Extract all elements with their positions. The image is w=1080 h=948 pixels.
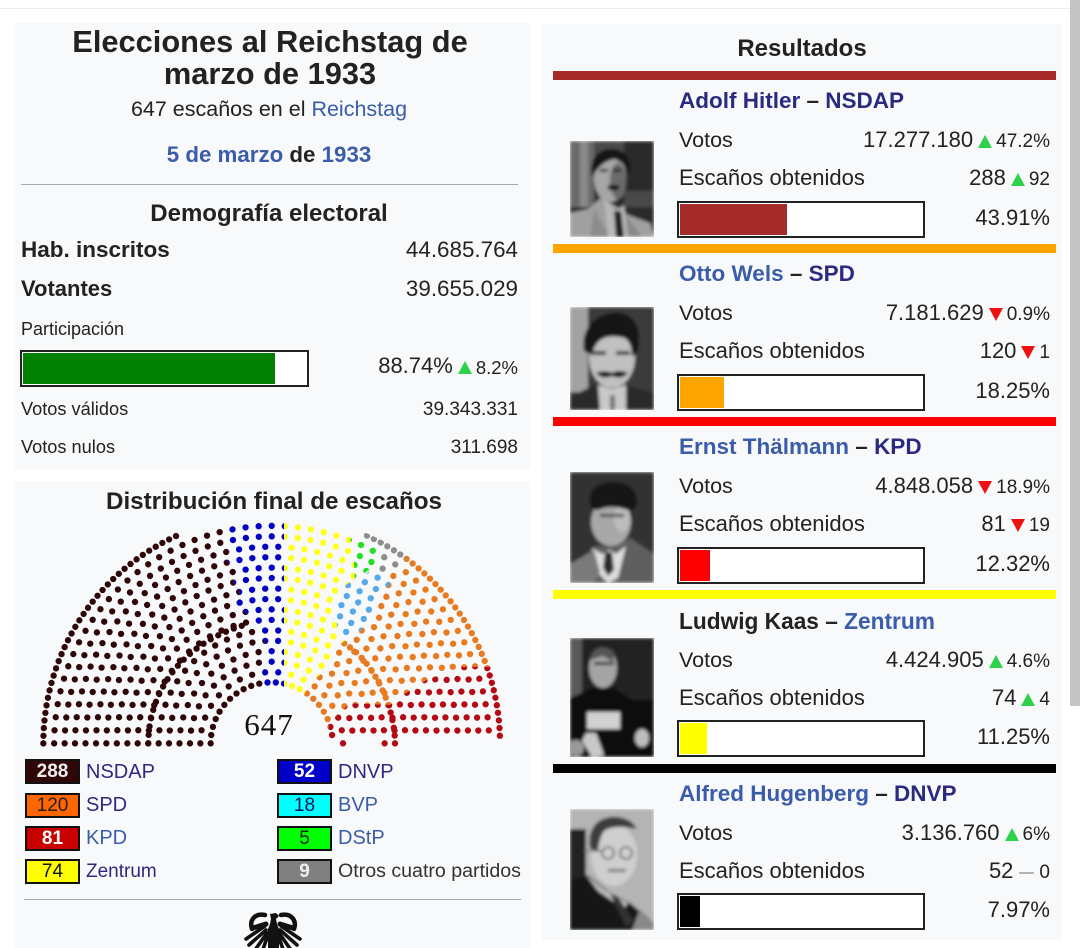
hemicycle chart [40, 522, 503, 746]
seat share: 43.91% [975, 205, 1050, 230]
seats label: Escaños obtenidos [679, 165, 865, 190]
seats label: Escaños obtenidos [679, 338, 865, 363]
legend label: DNVP: DNVP [338, 761, 394, 783]
legend label: NSDAP: NSDAP [86, 761, 155, 783]
seat share bar [677, 201, 925, 238]
heading: results: Resultados [737, 35, 867, 62]
top rule [0, 8, 1070, 9]
legend: BVP: 18 [294, 795, 315, 816]
seats label: Escaños obtenidos [679, 685, 865, 710]
legend label: DStP: DStP [338, 827, 385, 849]
heading: seat distribution: Distribución final de escaños [106, 488, 442, 515]
null votes value: 311.698 [451, 437, 518, 458]
turnout bar [20, 350, 309, 387]
legend: BVP [277, 793, 332, 818]
seats value: 92 [1029, 168, 1050, 190]
seat share bar [677, 893, 925, 930]
seats value: 4 [1039, 688, 1050, 710]
panel: election summary [15, 23, 530, 469]
seats value: 288 [969, 165, 1006, 190]
votes value: 4.6% [1007, 650, 1050, 672]
seat share bar [677, 547, 925, 584]
heading: electoral demography: Demografía electoral [150, 200, 388, 227]
registered label: Hab. inscritos [21, 237, 170, 262]
candidate name: Hugenberg: Alfred Hugenberg – DNVP [679, 781, 957, 806]
legend label: Zentrum: Zentrum [86, 861, 157, 882]
seats value: 19 [1029, 514, 1050, 536]
legend: KPD [25, 826, 80, 851]
votes value: 6% [1023, 824, 1050, 844]
seat share: 12.32% [975, 551, 1050, 576]
scrollbar [1070, 0, 1080, 706]
votes value: 4.424.905 [886, 647, 984, 672]
legend: Zentrum [25, 859, 80, 884]
portrait: Thälmann [570, 472, 654, 583]
portrait: Hugenberg [570, 809, 654, 930]
registered value: 44.685.764 [406, 237, 518, 262]
seats value: 120 [980, 338, 1016, 363]
legend: KPD: 81 [42, 828, 63, 849]
votes value: 0.9% [1007, 304, 1050, 324]
votes label: Votos [679, 648, 733, 672]
seats value [992, 685, 1050, 710]
null votes label: Votos nulos [21, 437, 115, 457]
votes value [863, 127, 1050, 152]
seats label: Escaños obtenidos [679, 858, 865, 883]
legend label: others: Otros cuatro partidos [338, 860, 521, 882]
legend: Zentrum: 74 [42, 861, 63, 882]
legend: NSDAP: 288 [37, 761, 68, 782]
votes value: 7.181.629 [886, 300, 984, 325]
divider [24, 899, 521, 900]
seat share: 18.25% [975, 378, 1050, 403]
turnout label: Participación [21, 319, 124, 339]
votes label: Votos [679, 474, 733, 498]
portrait: Hitler [570, 141, 654, 237]
votes label: Votos [679, 821, 733, 845]
title: Elecciones al Reichstag de [72, 24, 468, 59]
colour bar: DNVP [553, 764, 1056, 773]
candidate name: Thälmann: Ernst Thälmann – KPD [679, 434, 922, 459]
legend: DNVP [277, 759, 332, 784]
legend label: SPD: SPD [86, 794, 127, 816]
title: marzo de 1933 [164, 56, 376, 91]
panel: seat distribution [15, 481, 530, 948]
legend: others [277, 859, 332, 884]
votes value [875, 473, 1050, 498]
votes value [886, 300, 1050, 325]
votes value [902, 820, 1050, 845]
votes value: 47.2% [996, 130, 1050, 152]
total seats: 647 [244, 707, 294, 742]
votes value: 18.9% [996, 476, 1050, 498]
subtitle: 647 escaños en el Reichstag [131, 97, 407, 121]
colour bar: KPD [553, 417, 1056, 426]
votes label: Votos [679, 128, 733, 152]
panel: results [542, 24, 1062, 940]
divider [21, 184, 518, 185]
portrait: Kaas [570, 638, 654, 757]
valid votes value: 39.343.331 [423, 399, 518, 420]
legend: DStP: 5 [299, 828, 310, 849]
turnout value: 8.2% [476, 356, 518, 378]
legend: SPD: 120 [37, 795, 68, 816]
seats value [980, 338, 1050, 363]
votes value: 3.136.760 [902, 820, 1000, 845]
legend: NSDAP [25, 759, 80, 784]
seats value: 0 [1039, 862, 1050, 882]
voters label: Votantes [21, 276, 112, 301]
seats label: Escaños obtenidos [679, 511, 865, 536]
candidate name: Wels: Otto Wels – SPD [679, 261, 855, 286]
votes value: 17.277.180 [863, 127, 973, 152]
seats value: 52 [989, 858, 1013, 883]
votes value [886, 647, 1050, 672]
seats value [989, 858, 1050, 883]
seats value: 81 [981, 511, 1006, 536]
valid votes label: Votos válidos [21, 399, 128, 419]
colour bar: SPD [553, 244, 1056, 253]
icon: eagle emblem [244, 912, 302, 948]
turnout value: 88.74% [378, 353, 453, 378]
legend label: BVP: BVP [338, 794, 378, 816]
seats value [969, 165, 1050, 190]
portrait: Wels [570, 307, 654, 410]
title [72, 24, 468, 91]
colour bar: Zentrum [553, 590, 1056, 599]
candidate name: Kaas: Ludwig Kaas – Zentrum [679, 608, 935, 634]
seat share bar [677, 720, 925, 757]
turnout value [378, 353, 518, 378]
legend: SPD [25, 793, 80, 818]
seat share: 11.25% [977, 724, 1050, 749]
seats value: 74 [992, 685, 1016, 710]
votes label: Votos [679, 301, 733, 325]
voters value: 39.655.029 [406, 276, 518, 301]
legend label: KPD: KPD [86, 827, 127, 849]
legend: DNVP: 52 [294, 761, 315, 782]
election date: 5 de marzo de 1933 [167, 142, 371, 167]
legend: others: 9 [299, 861, 310, 882]
colour bar: NSDAP [553, 71, 1056, 80]
legend: DStP [277, 826, 332, 851]
votes value: 4.848.058 [875, 473, 973, 498]
seat share: 7.97% [988, 897, 1050, 922]
seat share bar [677, 374, 925, 411]
candidate name: Hitler: Adolf Hitler – NSDAP [679, 88, 904, 113]
seats value [981, 511, 1050, 536]
seats value: 1 [1039, 342, 1050, 362]
